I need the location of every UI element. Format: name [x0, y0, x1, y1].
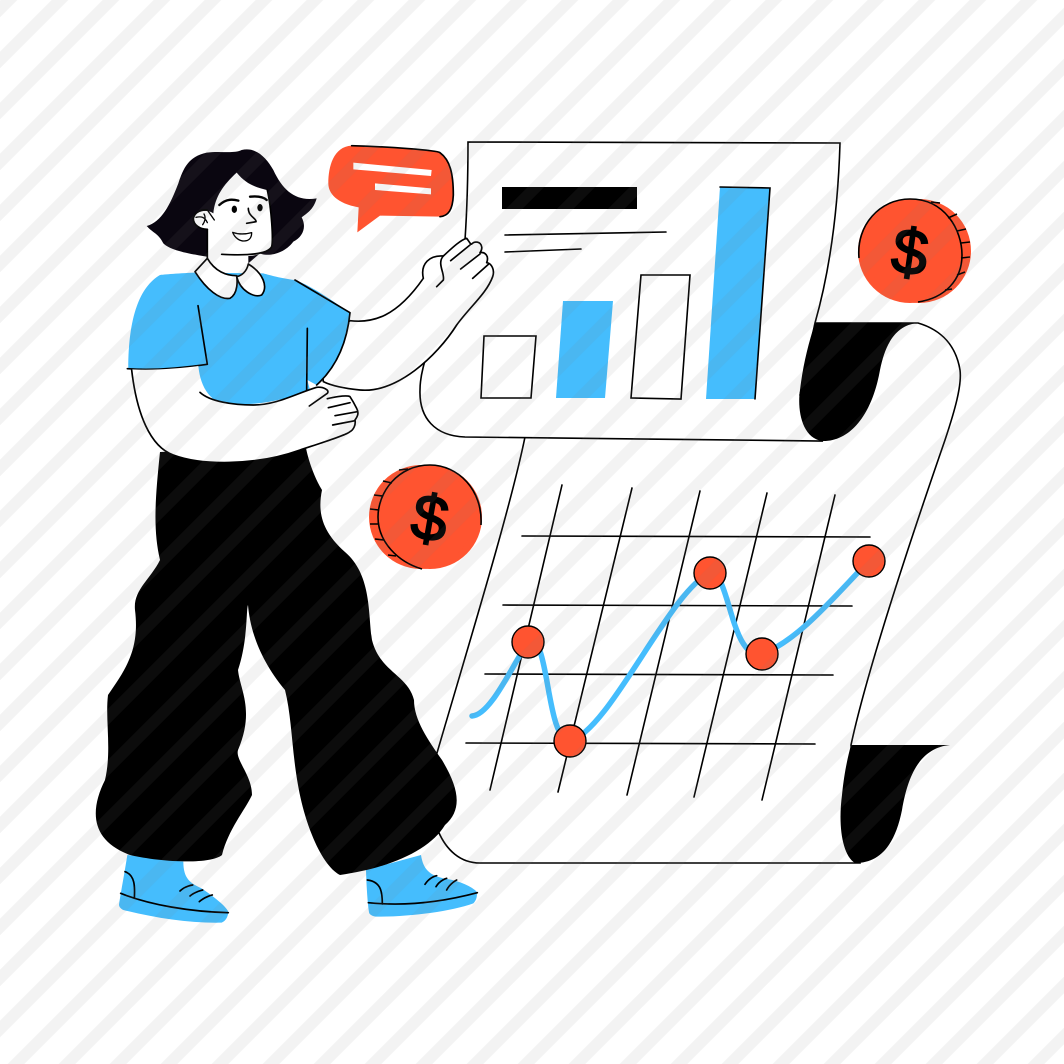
scroll document	[420, 142, 960, 863]
report title bar	[502, 187, 637, 209]
upper body	[127, 146, 493, 463]
line chart curve	[472, 561, 869, 741]
black lower paper fold	[841, 745, 950, 863]
left shoe	[119, 855, 228, 923]
report text lines	[505, 232, 666, 252]
black upper paper fold	[799, 323, 918, 441]
collar	[195, 258, 265, 299]
lower arm and hand	[132, 366, 358, 463]
hair	[147, 149, 317, 263]
raised arm and hand	[320, 238, 493, 390]
line chart grid	[466, 485, 870, 800]
dollar sign: $	[887, 214, 933, 290]
trousers	[96, 448, 457, 875]
bar chart	[481, 187, 770, 399]
line chart points	[512, 545, 885, 757]
coin: left	[369, 465, 482, 569]
eyes	[232, 204, 263, 213]
right shoe	[366, 855, 477, 917]
lower sheet of paper	[430, 323, 960, 863]
speech bubble	[328, 146, 453, 232]
dollar sign: $	[406, 479, 454, 557]
blue blouse	[128, 273, 350, 404]
character	[96, 146, 493, 923]
coin: right	[858, 199, 971, 303]
blouse lines	[127, 280, 350, 392]
upper sheet of paper	[420, 142, 840, 441]
neck and face	[193, 173, 272, 277]
face lines	[193, 190, 272, 258]
